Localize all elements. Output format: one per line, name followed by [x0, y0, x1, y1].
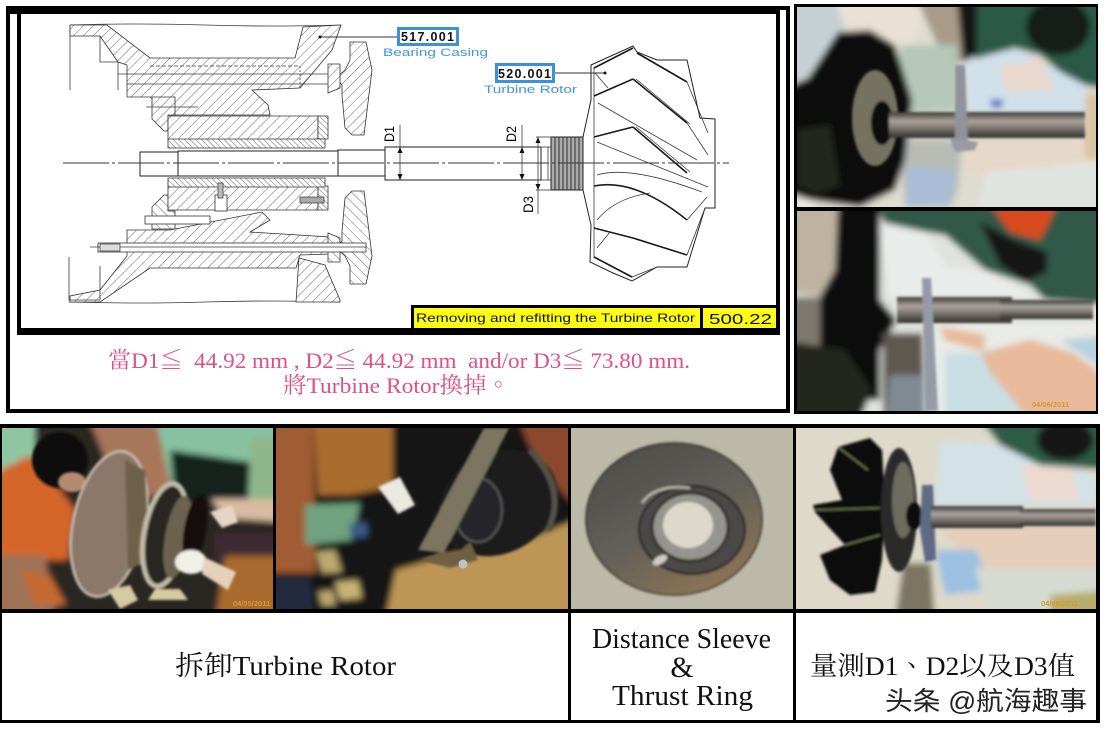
watermark: 头条 @航海趣事 — [885, 686, 1087, 716]
dimension D1 — [381, 125, 402, 180]
dimension D2: D2 — [503, 126, 519, 142]
replacement criteria text: 將Turbine Rotor換掉。 — [283, 373, 510, 398]
callout: 517.001 Bearing Casing: Bearing Casing — [383, 47, 488, 59]
photo: measuring D1, D2 and D3: 04/06/2011 — [1041, 599, 1078, 608]
photo: removing the turbine rotor, close-up — [276, 428, 568, 609]
caption cell: distance sleeve and thrust ring: & — [670, 651, 694, 684]
panel: bottom photo row with captions — [0, 415, 1109, 723]
caption cell: measure D1, D2, D3: 量測D1、D2以及D3值 — [810, 652, 1075, 681]
photo: caliper on rotor shaft with hand — [797, 211, 1096, 411]
photo: distance sleeve and thrust ring — [571, 428, 793, 609]
caption cell: measure D1, D2, D3 — [796, 613, 1096, 720]
callout: 520.001 Turbine Rotor: Turbine Rotor — [484, 84, 577, 96]
photo: measuring D1, D2 and D3 — [796, 428, 1096, 609]
caption cell: removing the rotor — [2, 613, 568, 720]
centre line — [63, 162, 729, 164]
callout: 520.001 Turbine Rotor: 520.001 — [498, 67, 551, 81]
title bar: 500.22 — [709, 311, 772, 328]
threaded section — [551, 137, 583, 190]
caption cell: distance sleeve and thrust ring: Distance Sleeve — [592, 624, 771, 655]
panel: measurement photos — [780, 0, 1109, 420]
callout: 517.001 Bearing Casing: 517.001 — [401, 30, 454, 44]
caption cell: removing the rotor: 拆卸Turbine Rotor — [175, 651, 396, 681]
replacement criteria text: 當D1≦ 44.92 mm , D2≦ 44.92 mm and/or D3≦ 73.80 mm. — [108, 348, 690, 373]
callout: 517.001 Bearing Casing — [318, 28, 488, 59]
technical drawing: bearing casing section — [63, 24, 729, 303]
caption cell: distance sleeve and thrust ring: Thrust Ring — [612, 681, 753, 712]
caption cell: distance sleeve and thrust ring — [571, 613, 793, 720]
dimension D1: D1 — [381, 126, 397, 142]
title bar — [411, 305, 780, 332]
photo: removing the turbine rotor, workers at casing: 04/05/2011 — [233, 599, 270, 608]
turbine rotor wheel — [583, 46, 715, 281]
dimension D3 — [520, 137, 552, 214]
photo: removing the turbine rotor, workers at casing — [2, 428, 273, 609]
replacement criteria text — [108, 348, 690, 398]
photo: caliper on rotor shaft, top — [797, 7, 1096, 207]
title bar: Removing and refitting the Turbine Rotor — [416, 311, 695, 325]
panel: turbine rotor drawing and replacement criteria — [6, 6, 790, 413]
callout: 520.001 Turbine Rotor — [484, 64, 606, 96]
shaft — [140, 147, 551, 180]
photo: caliper on rotor shaft with hand: 04/06/2011 — [1032, 400, 1069, 409]
dimension D3: D3 — [520, 196, 536, 213]
dimension D2 — [503, 125, 524, 180]
